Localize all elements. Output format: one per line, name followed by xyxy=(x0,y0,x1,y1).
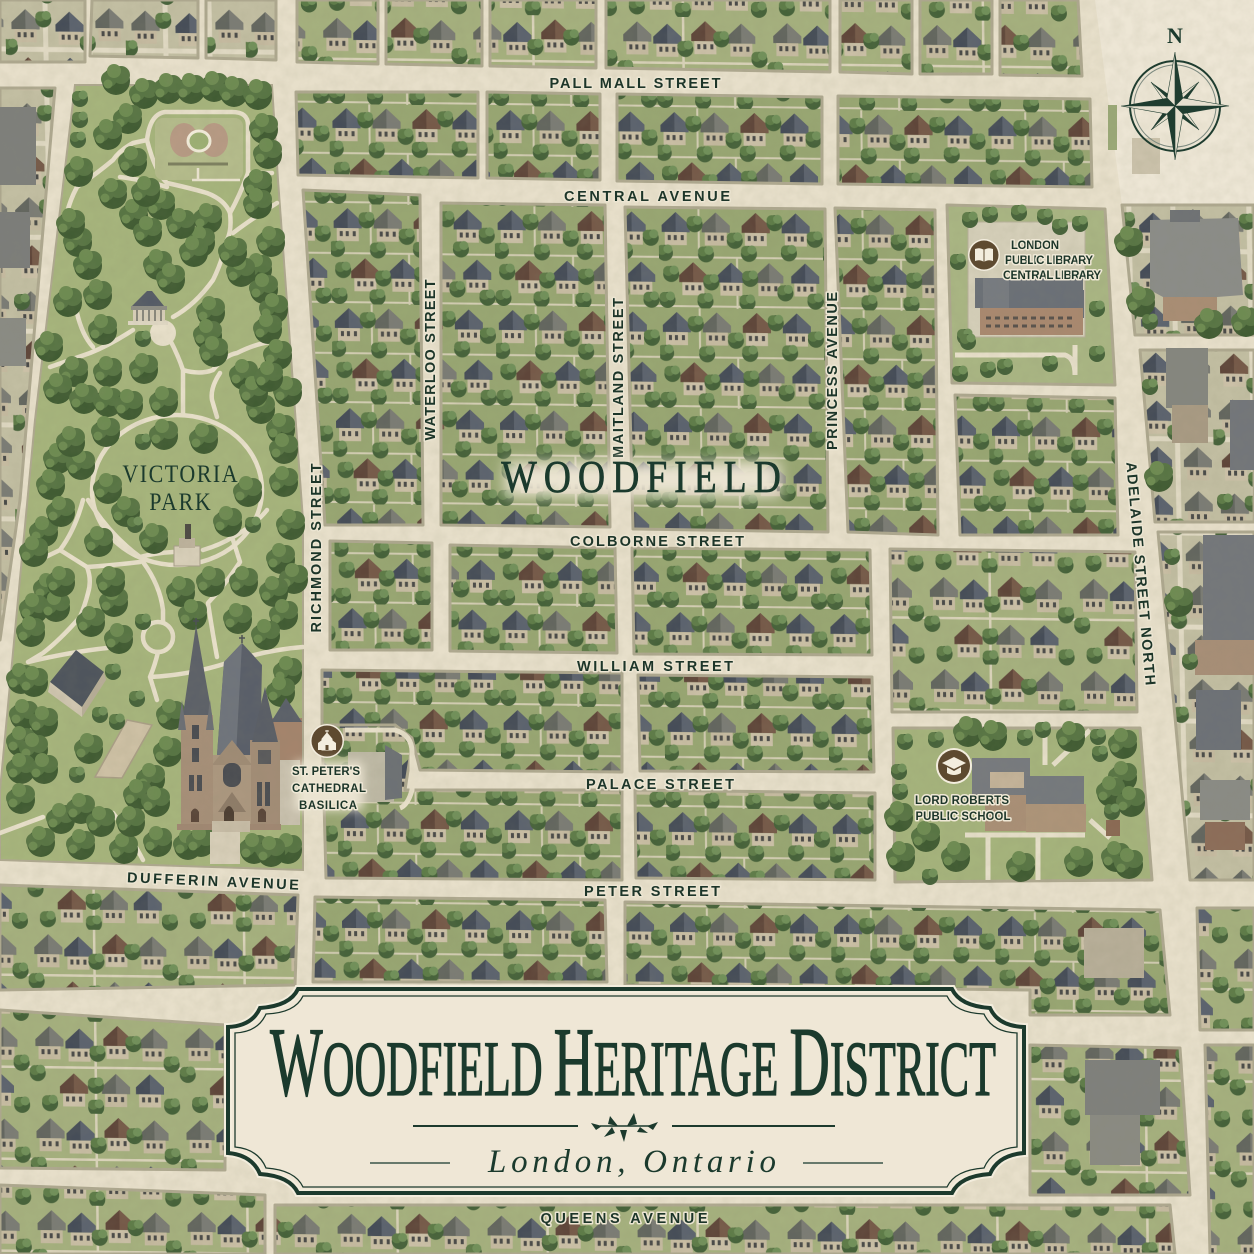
Woodfield label: WOODFIELD xyxy=(501,453,781,503)
buildings south of title xyxy=(1085,1060,1160,1115)
park lawn xyxy=(0,85,303,870)
library label: LONDON xyxy=(1011,240,1059,252)
forecourt xyxy=(210,832,240,864)
left tower xyxy=(181,715,213,827)
library label: CENTRAL LIBRARY xyxy=(1003,270,1101,282)
Adelaide Street North: ADELAIDE STREET NORTH xyxy=(1122,461,1158,686)
school building xyxy=(972,758,1120,836)
pavilion xyxy=(48,650,106,717)
monument xyxy=(174,524,200,566)
right tower xyxy=(250,740,280,827)
plaque subtitle: London, Ontario xyxy=(487,1144,776,1180)
halo xyxy=(295,762,363,810)
plaque title: WOODFIELD HERITAGE DISTRICT xyxy=(270,1008,996,1117)
compass N: N xyxy=(1167,23,1183,48)
icon: graduation cap xyxy=(936,748,972,784)
park trees xyxy=(6,64,308,867)
landmark: library xyxy=(968,239,1101,282)
school grounds xyxy=(884,716,1152,885)
plaque frame xyxy=(228,989,1024,1193)
Victoria Park label xyxy=(122,461,238,516)
title plaque xyxy=(228,989,1024,1193)
Central Avenue: CENTRAL AVENUE xyxy=(564,189,730,205)
icon: book xyxy=(968,239,1000,271)
panel: Victoria Park xyxy=(0,64,308,870)
northeast outbuilding xyxy=(1132,138,1160,174)
formal garden xyxy=(155,118,243,180)
right wing xyxy=(272,718,302,773)
Palace Street: PALACE STREET xyxy=(586,777,734,793)
park paths xyxy=(0,112,303,860)
centre facade xyxy=(213,755,251,825)
gazebo xyxy=(128,291,168,325)
top right paper corner xyxy=(1095,0,1254,205)
Peter Street: PETER STREET xyxy=(584,884,720,900)
street labels xyxy=(127,76,1158,1227)
icon: chapel xyxy=(310,724,344,758)
library label: PUBLIC LIBRARY xyxy=(1005,255,1093,267)
school text: LORD ROBERTS xyxy=(915,795,1009,807)
cathedral xyxy=(177,618,302,864)
library building xyxy=(975,278,1084,335)
school text: PUBLIC SCHOOL xyxy=(916,811,1010,823)
front steps xyxy=(177,824,281,830)
compass rose xyxy=(1121,23,1229,160)
school walks xyxy=(965,730,1110,880)
school text xyxy=(915,795,1010,823)
landmark: school xyxy=(915,748,1010,823)
library label xyxy=(1003,240,1101,282)
large building east of Adelaide xyxy=(1150,210,1243,321)
subtitle lines xyxy=(370,1162,883,1164)
Queens Avenue: QUEENS AVENUE xyxy=(540,1211,708,1227)
Woodfield halo xyxy=(505,462,780,496)
William Street: WILLIAM STREET xyxy=(577,659,733,675)
Victoria Park label: PARK xyxy=(149,489,211,516)
Waterloo Street: WATERLOO STREET xyxy=(423,279,439,440)
Richmond Street: RICHMOND STREET xyxy=(309,463,325,632)
outskirts buildings xyxy=(1084,105,1254,1165)
ornament rules and sprig xyxy=(413,1113,835,1142)
Victoria Park label: VICTORIA xyxy=(122,461,238,488)
cathedral text xyxy=(292,766,366,812)
plaza by gazebo xyxy=(150,320,176,346)
Dufferin Avenue: DUFFERIN AVENUE xyxy=(127,870,300,894)
St Peter's side building xyxy=(345,730,412,808)
library grounds xyxy=(947,204,1115,385)
Maitland Street: MAITLAND STREET xyxy=(611,298,627,458)
Pall Mall Street: PALL MALL STREET xyxy=(550,76,721,92)
cathedral text: BASILICA xyxy=(299,800,357,812)
dirt field xyxy=(95,720,152,778)
west side buildings xyxy=(0,107,36,366)
Colborne Street: COLBORNE STREET xyxy=(570,534,744,550)
cathedral text: CATHEDRAL xyxy=(292,783,366,795)
landmark: cathedral label xyxy=(292,724,366,812)
nave roof xyxy=(217,643,262,755)
Princess Avenue: PRINCESS AVENUE xyxy=(825,292,841,450)
cathedral text: ST. PETER'S xyxy=(292,766,360,778)
